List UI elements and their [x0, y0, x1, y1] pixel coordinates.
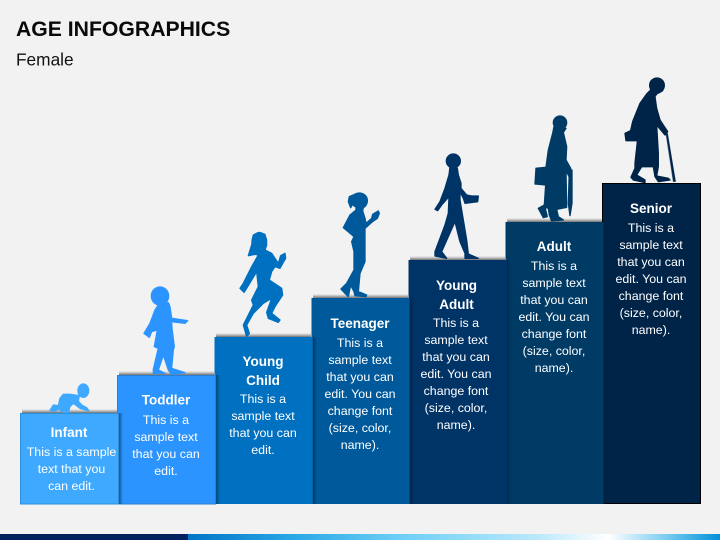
adult text: change font	[522, 327, 587, 341]
toddler text: Toddler	[142, 392, 191, 408]
icon: infant silhouette	[50, 384, 89, 412]
teenager text: Teenager	[330, 316, 390, 331]
icon: adult silhouette	[535, 116, 572, 221]
adult text: This is a	[531, 259, 577, 273]
icon: toddler silhouette	[144, 287, 188, 374]
infant text: This is a sample	[27, 445, 116, 459]
senior text: (size, color,	[620, 306, 682, 320]
young child text: This is a	[240, 392, 286, 406]
icon: teenager silhouette	[341, 193, 379, 297]
senior text: name).	[632, 323, 670, 337]
panel: toddler step	[118, 371, 220, 504]
toddler text: edit.	[154, 464, 178, 478]
panel: young adult step	[408, 256, 511, 504]
young child text: edit.	[251, 443, 275, 457]
adult text: that you can	[520, 293, 588, 307]
teenager text: name).	[341, 438, 379, 452]
panel: infant step	[20, 409, 123, 504]
young adult text: Adult	[439, 297, 474, 312]
teenager text: edit. You can	[325, 387, 396, 401]
infant text: text that you	[38, 462, 105, 476]
panel: teenager step	[312, 294, 414, 504]
teenager text: sample text	[328, 353, 392, 367]
teenager text: (size, color,	[329, 421, 391, 435]
teenager text: change font	[328, 404, 393, 418]
young child text: Child	[246, 373, 280, 388]
adult text: sample text	[522, 276, 586, 290]
young adult text: name).	[437, 418, 475, 432]
teenager text: This is a	[337, 336, 383, 350]
panel: young child step	[214, 333, 317, 504]
young child text: that you can	[229, 426, 297, 440]
icon: young adult silhouette	[435, 154, 478, 258]
young adult text: change font	[424, 384, 489, 398]
adult text: edit. You can	[519, 310, 590, 324]
icon: young child silhouette	[240, 232, 286, 337]
toddler text: This is a	[143, 413, 189, 427]
senior text: edit. You can	[616, 272, 687, 286]
senior text: Senior	[630, 201, 673, 216]
young adult text: edit. You can	[421, 367, 492, 381]
panel: adult step	[506, 218, 608, 504]
young adult text: that you can	[422, 350, 490, 364]
young adult text: This is a	[433, 316, 479, 330]
young child text: Young	[242, 354, 284, 369]
title: AGE INFOGRAPHICS	[16, 18, 230, 41]
panel: senior step	[602, 184, 700, 504]
adult text: (size, color,	[523, 344, 585, 358]
young child text: sample text	[231, 409, 295, 423]
infant text: Infant	[51, 425, 88, 440]
young adult text: (size, color,	[425, 401, 487, 415]
adult text: name).	[535, 361, 573, 375]
toddler text: that you can	[132, 447, 200, 461]
teenager text: that you can	[326, 370, 394, 384]
senior text: change font	[619, 289, 684, 303]
adult text: Adult	[537, 239, 572, 254]
infant text: can edit.	[48, 479, 95, 493]
young adult text: sample text	[424, 333, 488, 347]
icon: senior silhouette	[625, 78, 676, 183]
toddler text: sample text	[134, 430, 198, 444]
subtitle: Female	[16, 50, 74, 70]
senior text: that you can	[617, 255, 685, 269]
senior text: sample text	[619, 238, 683, 252]
senior text: This is a	[628, 221, 674, 235]
young adult text: Young	[436, 278, 477, 293]
footer bar	[0, 534, 720, 540]
